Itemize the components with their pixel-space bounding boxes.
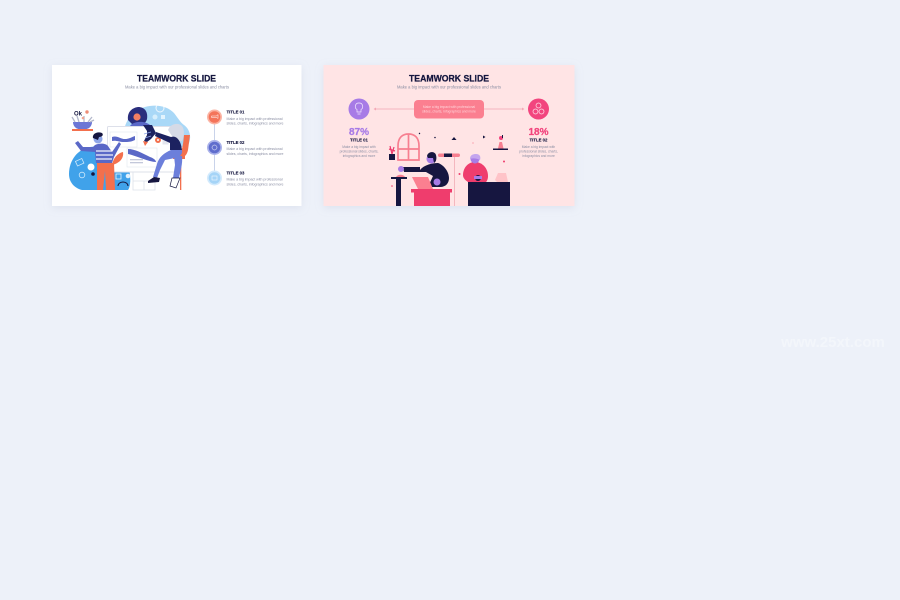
timeline item: title 03: Make a big impact with professional <box>226 178 283 182</box>
timeline item: title 01: TITLE 01 <box>226 110 245 115</box>
timeline item: title 01 <box>207 110 284 126</box>
icon: indigo circle <box>207 140 222 155</box>
stat: 87% title 01: professional slides, charts, <box>340 150 379 154</box>
stat: 87% title 01: infographics and more <box>343 154 375 158</box>
icon: orange circle <box>207 110 222 124</box>
timeline item: title 03: TITLE 03 <box>226 170 245 176</box>
icon: purple lightbulb circle <box>348 98 370 120</box>
heading: pink slide title: TEAMWORK SLIDE <box>409 74 489 84</box>
decorative marks <box>391 133 505 187</box>
timeline item: title 02 <box>207 140 284 156</box>
desk pink <box>411 189 452 206</box>
stat: 87% title 01: Make a big impact with <box>342 145 376 149</box>
slider and pole <box>438 154 460 206</box>
arrow: to right circle <box>484 108 524 110</box>
callout: central pink box: Make a big impact with professional <box>423 105 475 109</box>
timeline item: title 02: slides, charts, infographics and more <box>226 152 284 156</box>
timeline item: title 01: Make a big impact with professional <box>226 117 283 121</box>
stat: 18% title 02: professional slides, charts, <box>519 150 558 154</box>
shelf with vase <box>493 135 508 150</box>
plant shelf: Ok <box>74 112 83 118</box>
laptop light <box>495 173 508 182</box>
icons: blob decorations <box>75 104 165 186</box>
callout: central pink box <box>414 100 484 118</box>
stat: 18% title 02: Make a big impact with <box>522 145 555 149</box>
callout: central pink box: slides, charts, infographics and more <box>422 110 476 114</box>
illustration: office workers <box>389 133 510 206</box>
person: woman seated at right <box>148 124 190 190</box>
timeline item: title 01: slides, charts, infographics and more <box>226 122 284 126</box>
plant pot <box>389 146 395 160</box>
icon: pink circles emblem <box>528 98 549 120</box>
person: woman at top, behind board <box>128 107 151 126</box>
person: man at left <box>75 132 121 190</box>
timeline item: title 03 <box>207 170 284 186</box>
stat: 18% title 02: infographics and more <box>522 154 555 158</box>
illustration: team at whiteboard <box>69 104 190 190</box>
stat: 87% title 01: TITLE 01 <box>350 138 369 142</box>
timeline item: title 03: slides, charts, infographics and more <box>226 182 284 186</box>
whiteboard <box>108 126 178 190</box>
arm: top woman reaching across board <box>143 125 156 146</box>
stat: 18% title 02: 18% <box>528 127 549 138</box>
desk navy <box>468 182 510 206</box>
timeline connector <box>214 120 215 180</box>
stat: 18% title 02 <box>519 127 558 158</box>
text: white slide subtitle: Make a big impact with our professional slides and charts <box>125 84 229 90</box>
person: man with laptop <box>398 152 449 189</box>
panel: pink teamwork slide <box>324 65 574 206</box>
window <box>398 134 419 160</box>
stat: 87% title 01 <box>340 127 379 158</box>
arrow: to left circle <box>374 108 414 110</box>
side table with lamp <box>391 175 407 206</box>
stat: 87% title 01: 87% <box>349 127 369 138</box>
timeline item: title 02: Make a big impact with professional <box>226 147 283 151</box>
timeline item: title 02: TITLE 02 <box>226 140 245 145</box>
blob: left blue background <box>69 146 130 190</box>
panel: white teamwork slide <box>52 65 302 206</box>
stat: 18% title 02: TITLE 02 <box>530 138 548 142</box>
icon: light blue circle <box>207 170 222 186</box>
watermark: www.25xt.com <box>780 334 885 351</box>
person: woman in pink <box>463 154 488 182</box>
heading: white slide title: TEAMWORK SLIDE <box>137 74 216 84</box>
blob: upper blue background <box>123 106 190 147</box>
text: pink slide subtitle: Make a big impact with our professional slides and charts <box>397 84 501 90</box>
